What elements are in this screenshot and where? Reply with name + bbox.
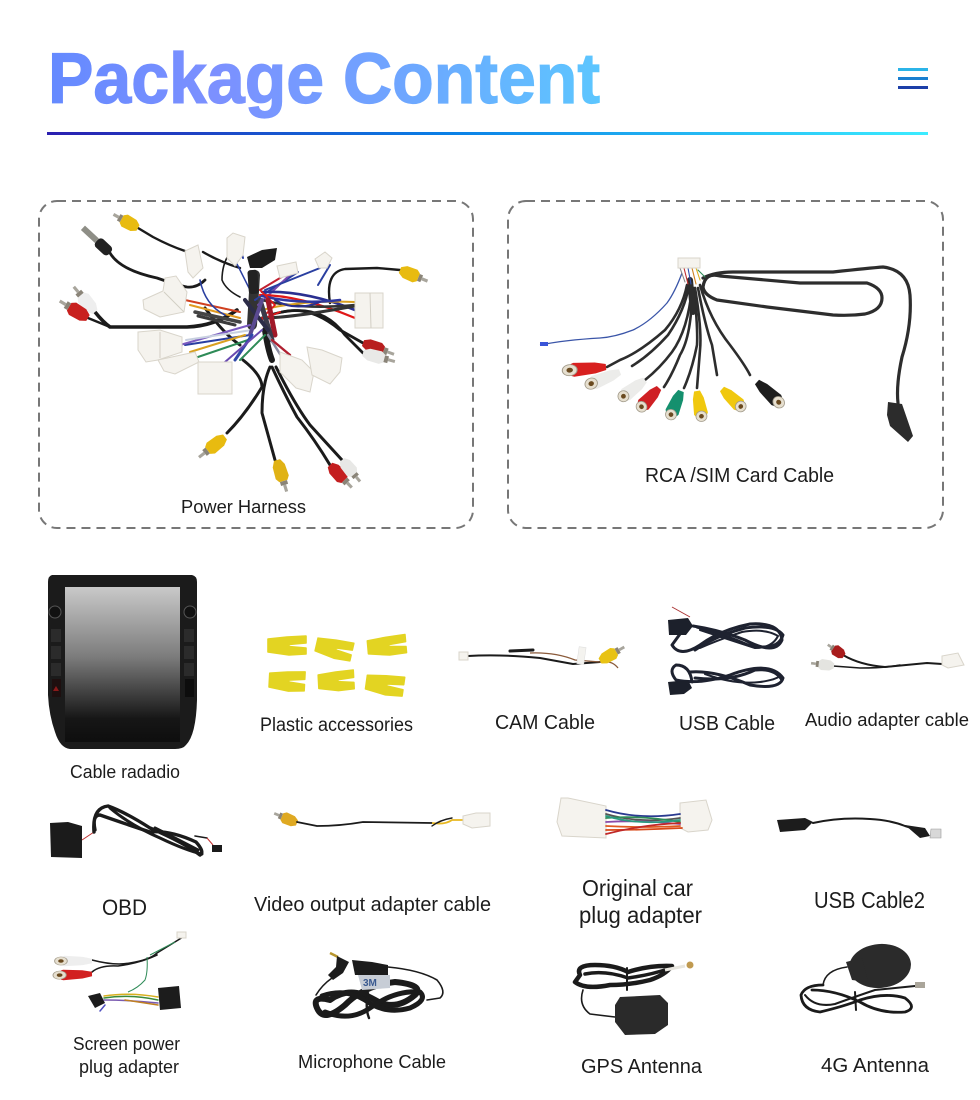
harness RCA plugs	[56, 208, 430, 494]
label: plastic accessories: Plastic accessories	[260, 715, 413, 736]
label: USB cable: USB Cable	[679, 713, 775, 735]
item: screen power plug adapter	[53, 932, 186, 1077]
microphone cable drawing: 3M	[363, 978, 377, 989]
label: original car plug adapter: plug adapter	[579, 902, 702, 928]
panel: power harness	[39, 201, 473, 528]
label: microphone cable: Microphone Cable	[298, 1051, 446, 1072]
item: video output adapter cable	[254, 808, 491, 916]
label: RCA SIM card cable: RCA /SIM Card Cable	[645, 465, 834, 487]
USB cables drawing	[668, 607, 783, 695]
item: USB cable	[668, 607, 783, 735]
video cable drawing	[272, 808, 490, 828]
label: audio adapter cable: Audio adapter cable	[805, 709, 969, 730]
item: cable radadio	[48, 575, 197, 782]
label: USB cable 2: USB Cable2	[814, 887, 925, 913]
RCA cable fan	[607, 280, 750, 388]
icon: menu	[898, 68, 928, 89]
harness coloured wire bundle	[180, 248, 355, 362]
yellow clips	[268, 635, 407, 697]
4G antenna drawing	[801, 941, 925, 1012]
OBD cable drawing	[50, 806, 222, 858]
label: cable radadio: Cable radadio	[70, 762, 180, 782]
harness connectors	[138, 233, 383, 394]
panel: RCA SIM card cable	[508, 201, 943, 528]
label: GPS antenna: GPS Antenna	[581, 1056, 703, 1078]
item: plastic accessories	[260, 635, 413, 736]
RCA jacks	[562, 360, 788, 423]
title underline	[47, 132, 928, 135]
label: screen power plug adapter: Screen power	[73, 1034, 180, 1054]
blue wire	[540, 273, 682, 345]
SIM box	[887, 402, 913, 442]
label: screen power plug adapter: plug adapter	[79, 1057, 179, 1077]
microphone cable drawing	[316, 953, 443, 1018]
item: OBD	[50, 806, 222, 920]
item: original car plug adapter	[557, 798, 712, 928]
label: original car plug adapter	[579, 875, 702, 928]
harness black cables	[88, 228, 400, 465]
GPS antenna drawing	[575, 962, 694, 1035]
item: microphone cable	[298, 953, 446, 1072]
CAM cable drawing	[459, 642, 627, 668]
label: screen power plug adapter	[73, 1034, 180, 1077]
label: video output adapter cable: Video output adapter cable	[254, 894, 491, 916]
label: OBD: OBD	[102, 895, 147, 920]
plug adapter drawing	[557, 798, 712, 838]
item: CAM cable	[459, 642, 627, 734]
title: Package Content	[48, 40, 600, 119]
label: power harness: Power Harness	[181, 497, 306, 517]
item: GPS antenna	[575, 962, 703, 1078]
small coloured wires	[680, 268, 705, 284]
radio head unit	[48, 575, 197, 749]
item: audio adapter cable	[805, 640, 969, 730]
label: 4G antenna: 4G Antenna	[821, 1055, 930, 1077]
USB cable 2 drawing	[777, 818, 941, 838]
item: USB cable 2	[777, 818, 941, 913]
SIM cable loops	[703, 267, 910, 403]
item: 4G antenna	[801, 941, 930, 1077]
audio adapter drawing	[810, 640, 964, 671]
label: original car plug adapter: Original car	[582, 875, 693, 901]
label: CAM cable: CAM Cable	[495, 712, 595, 734]
connector	[678, 258, 700, 268]
screen power cable drawing	[53, 932, 186, 1011]
